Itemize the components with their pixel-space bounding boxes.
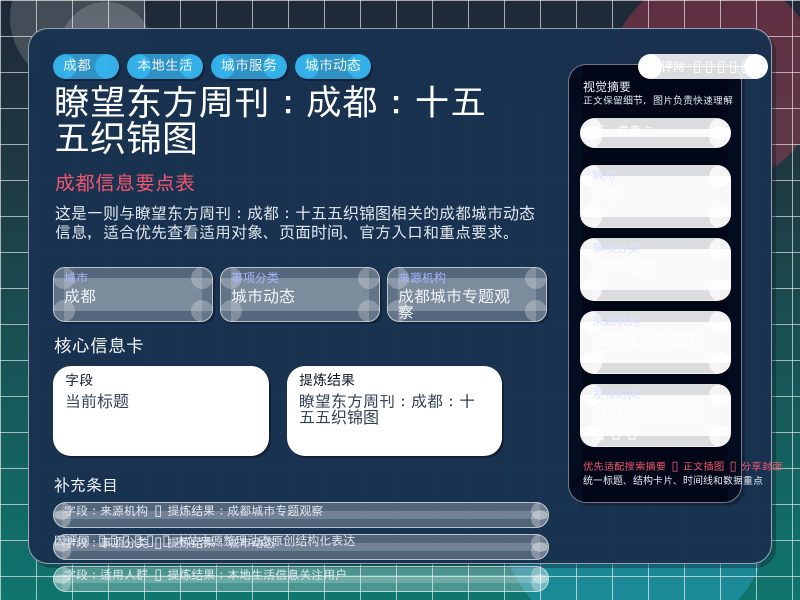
- sidebar card: 发布时间: ▯: [594, 401, 606, 425]
- sidebar card: 来源机构: 来源机构: [592, 315, 640, 327]
- fact card: 城市: 城市: [64, 272, 88, 284]
- fact card: 城市: 成都: [64, 288, 96, 304]
- sidebar card: 事项分类: [580, 238, 731, 301]
- tag: 成都: 成都: [63, 58, 91, 72]
- sidebar card: 发布时间: [580, 384, 731, 447]
- fact card: 事项分类: 事项分类: [231, 272, 279, 284]
- sidebar pill: 信息卡: [580, 118, 731, 148]
- sidebar card: 城市: 城市: [592, 169, 616, 181]
- sidebar red note: ▯: [671, 459, 678, 474]
- row: 来源机构: [53, 502, 549, 528]
- sidebar red note: [583, 459, 783, 474]
- tag: 本地生活: 本地生活: [137, 58, 193, 72]
- core card: 字段: [53, 366, 269, 456]
- core card: 字段: 当前标题: [65, 393, 129, 409]
- sidebar card: 发布时间: ▯: [594, 418, 606, 442]
- sidebar card: 发布时间: 发布时间: [592, 388, 640, 400]
- top right pill: ▯: [741, 57, 749, 75]
- sidebar card: 事项分类: 事项分类: [592, 242, 640, 254]
- footer note: ▯: [98, 531, 106, 549]
- sidebar note: 统一标题、结构卡片、时间线和数据重点: [583, 476, 763, 486]
- row: 适用人群: 字段：适用人群 提炼结果：本地生活信息关注用户: [64, 569, 347, 581]
- row: 事项分类: 字段：事项分类 提炼结果：城市动态: [64, 537, 275, 549]
- description: 这是一则与瞭望东方周刊：成都：十五五织锦图相关的成都城市动态信息，适合优先查看适用对象、页面时间、官方入口和重点要求。: [55, 205, 535, 240]
- top right pill: ▯: [729, 57, 737, 75]
- title: 瞭望东方周刊：成都：十五五织锦图: [54, 84, 486, 156]
- row: 事项分类: ▯: [154, 533, 162, 551]
- tag: 城市动态: [295, 54, 371, 79]
- core card: 提炼结果: [287, 366, 502, 456]
- tag: 城市动态: 城市动态: [305, 58, 361, 72]
- sidebar card: 发布时间: ▯: [610, 418, 622, 442]
- top right pill: 评网: [661, 61, 685, 73]
- fact card: 事项分类: [220, 267, 380, 322]
- sidebar red note: 优先适配搜索摘要 正文插图 分享封面: [583, 462, 783, 472]
- footer note: ▯: [162, 531, 170, 549]
- tag: 城市服务: 城市服务: [221, 58, 277, 72]
- tag: 成都: [53, 54, 119, 79]
- top right pill: ▯: [705, 57, 713, 75]
- sidebar card: 发布时间: ▯: [674, 401, 686, 425]
- footer note: 因评网 本站来源整理动态原创结构化表达: [54, 535, 355, 547]
- sidebar pill: 信息卡: 版：信息卡: [593, 125, 653, 137]
- top right pill: ▯: [693, 57, 701, 75]
- sidebar red note: ▯: [730, 459, 737, 474]
- sidebar heading: 视觉摘要: [583, 81, 631, 93]
- sidebar card: 发布时间: ▯: [626, 418, 638, 442]
- top right pill: ▯: [717, 57, 725, 75]
- tag: 城市服务: [211, 54, 287, 79]
- core card: 字段: 字段: [65, 373, 93, 387]
- sidebar panel: [568, 64, 745, 506]
- sidebar card: 城市: 成都: [592, 186, 624, 202]
- fact card: 来源机构: 成都城市专题观察: [398, 288, 510, 320]
- row: 来源机构: 字段：来源机构 提炼结果：成都城市专题观察: [64, 505, 323, 517]
- sidebar card: 发布时间: ▯: [690, 401, 702, 425]
- row: 适用人群: [53, 566, 549, 592]
- row: 适用人群: ▯: [154, 565, 162, 583]
- core card: 提炼结果: 瞭望东方周刊：成都：十五五织锦图: [299, 393, 475, 425]
- footer note: ▯: [134, 531, 142, 549]
- subtitle: 成都信息要点表: [55, 173, 195, 193]
- fact card: 事项分类: 城市动态: [231, 288, 295, 304]
- footer note: ▯: [146, 531, 154, 549]
- sidebar subtitle: 正文保留细节，图片负责快速理解: [583, 96, 733, 106]
- core card: 提炼结果: 提炼结果: [299, 373, 355, 387]
- sidebar card: 事项分类: 城市动态: [592, 259, 656, 275]
- fact card: 城市: [53, 267, 213, 322]
- sidebar card: 城市: [580, 165, 731, 228]
- sidebar card: 来源机构: 成都城市专题观察: [592, 332, 704, 364]
- footer note: ▯: [122, 531, 130, 549]
- fact card: 来源机构: [387, 267, 547, 322]
- sidebar card: 发布时间: ▯: [658, 401, 670, 425]
- footer note: [54, 531, 355, 549]
- sidebar card: 来源机构: [580, 311, 731, 374]
- tag: 本地生活: [127, 54, 203, 79]
- top right pill: [638, 54, 768, 79]
- heading: 核心信息卡: 核心信息卡: [54, 337, 144, 355]
- heading: 补充条目: 补充条目: [54, 477, 118, 493]
- fact card: 来源机构: 来源机构: [398, 272, 446, 284]
- row: 事项分类: [53, 534, 549, 560]
- sidebar card: 发布时间: ▯: [642, 401, 654, 425]
- sidebar card: 发布时间: ▯: [626, 401, 638, 425]
- row: 来源机构: ▯: [154, 501, 162, 519]
- footer note: ▯: [110, 531, 118, 549]
- sidebar card: 发布时间: ▯: [610, 401, 622, 425]
